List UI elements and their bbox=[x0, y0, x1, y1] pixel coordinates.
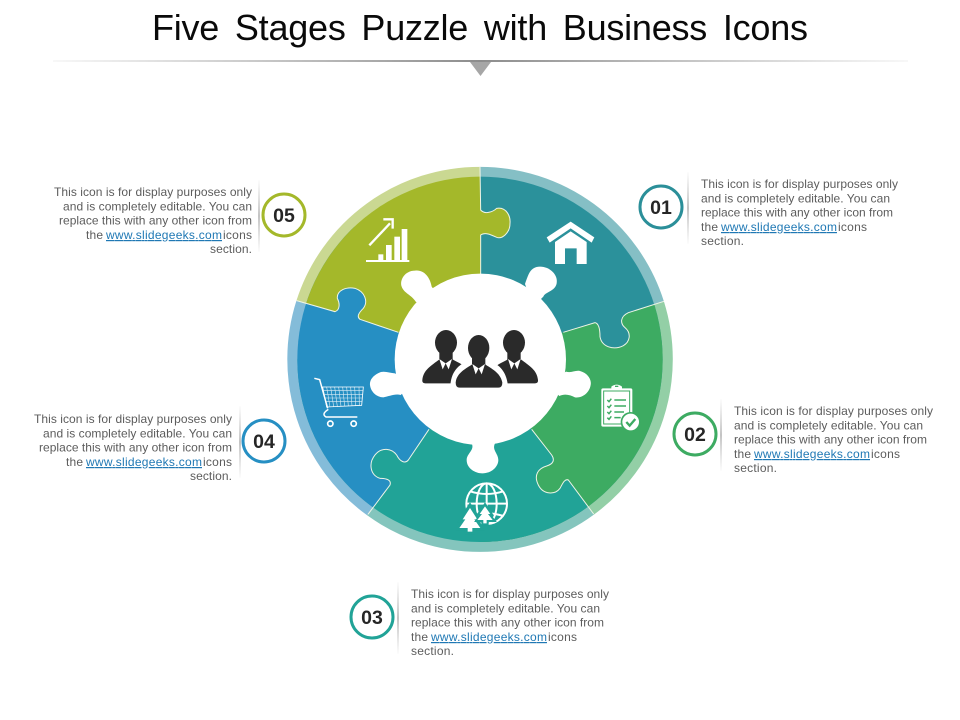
callout 04 bbox=[34, 406, 285, 483]
text block 03 bbox=[411, 587, 609, 658]
outer ring segments bbox=[292, 172, 668, 547]
text block 01: This icon is for display purposes only bbox=[701, 177, 898, 191]
text block 05 bbox=[54, 185, 252, 256]
text block 03: This icon is for display purposes only bbox=[411, 587, 609, 601]
text block 03: and is completely editable. You can bbox=[411, 602, 600, 616]
text block 04: and is completely editable. You can bbox=[43, 426, 232, 440]
number badge 04 bbox=[243, 420, 285, 462]
callout 05 bbox=[54, 180, 305, 256]
title: Five Stages Puzzle with Business Icons bbox=[152, 7, 808, 48]
number badge 05 bbox=[263, 194, 305, 236]
text block 01 bbox=[701, 177, 898, 248]
number badge 05: 05 bbox=[273, 205, 295, 227]
text block 03: section. bbox=[411, 644, 454, 658]
number badge 03 bbox=[351, 596, 393, 638]
text block 03: icons bbox=[548, 630, 577, 644]
number badge 01 bbox=[640, 186, 682, 228]
text block 02: and is completely editable. You can bbox=[734, 418, 923, 432]
text block 04: replace this with any other icon from bbox=[39, 440, 232, 454]
text block 01: www.slidegeeks.com bbox=[720, 220, 837, 234]
text block 01: icons bbox=[838, 220, 867, 234]
text block 02: icons bbox=[871, 447, 900, 461]
text block 05: section. bbox=[210, 242, 252, 256]
center hole with knobs bbox=[370, 267, 591, 473]
puzzle wheel bbox=[287, 166, 673, 552]
text block 04: www.slidegeeks.com bbox=[85, 455, 202, 469]
seam lines bbox=[297, 167, 664, 514]
text block 05: icons bbox=[223, 228, 252, 242]
text block 01: section. bbox=[701, 234, 744, 248]
text block 02: This icon is for display purposes only bbox=[734, 404, 933, 418]
callout 01 bbox=[640, 172, 898, 248]
text block 02: section. bbox=[734, 461, 777, 475]
text block 04 bbox=[34, 412, 232, 483]
puzzle pieces bbox=[297, 176, 663, 542]
callout 02 bbox=[674, 399, 933, 475]
text block 04: the bbox=[66, 455, 83, 469]
number badge 02 bbox=[674, 413, 716, 455]
text block 05: www.slidegeeks.com bbox=[105, 228, 222, 242]
number badge 01: 01 bbox=[650, 197, 672, 219]
text block 04: This icon is for display purposes only bbox=[34, 412, 232, 426]
text block 03: www.slidegeeks.com bbox=[430, 630, 547, 644]
callout 03 bbox=[351, 582, 609, 658]
text block 03: the bbox=[411, 630, 428, 644]
text block 02: the bbox=[734, 447, 751, 461]
header divider with pointer bbox=[53, 60, 908, 76]
number badge 04: 04 bbox=[253, 431, 275, 453]
text block 04: icons bbox=[203, 455, 232, 469]
icon: clipboard with check bbox=[601, 385, 641, 432]
text block 02: replace this with any other icon from bbox=[734, 432, 927, 446]
text block 02: www.slidegeeks.com bbox=[753, 447, 870, 461]
icon: business people bbox=[422, 330, 538, 388]
icon: shopping cart bbox=[314, 378, 363, 426]
text block 05: the bbox=[86, 228, 103, 242]
text block 05: and is completely editable. You can bbox=[63, 200, 252, 214]
icon: globe with trees bbox=[458, 483, 507, 533]
text block 05: replace this with any other icon from bbox=[59, 214, 252, 228]
text block 01: replace this with any other icon from bbox=[701, 206, 893, 220]
icon: house bbox=[547, 222, 594, 264]
number badge 02: 02 bbox=[684, 424, 706, 446]
text block 04: section. bbox=[190, 469, 232, 483]
text block 02 bbox=[734, 404, 933, 475]
text block 01: the bbox=[701, 220, 718, 234]
text block 05: This icon is for display purposes only bbox=[54, 185, 252, 199]
text block 03: replace this with any other icon from bbox=[411, 616, 604, 630]
icon: growth chart bbox=[366, 219, 409, 262]
number badge 03: 03 bbox=[361, 607, 383, 629]
text block 01: and is completely editable. You can bbox=[701, 192, 890, 206]
